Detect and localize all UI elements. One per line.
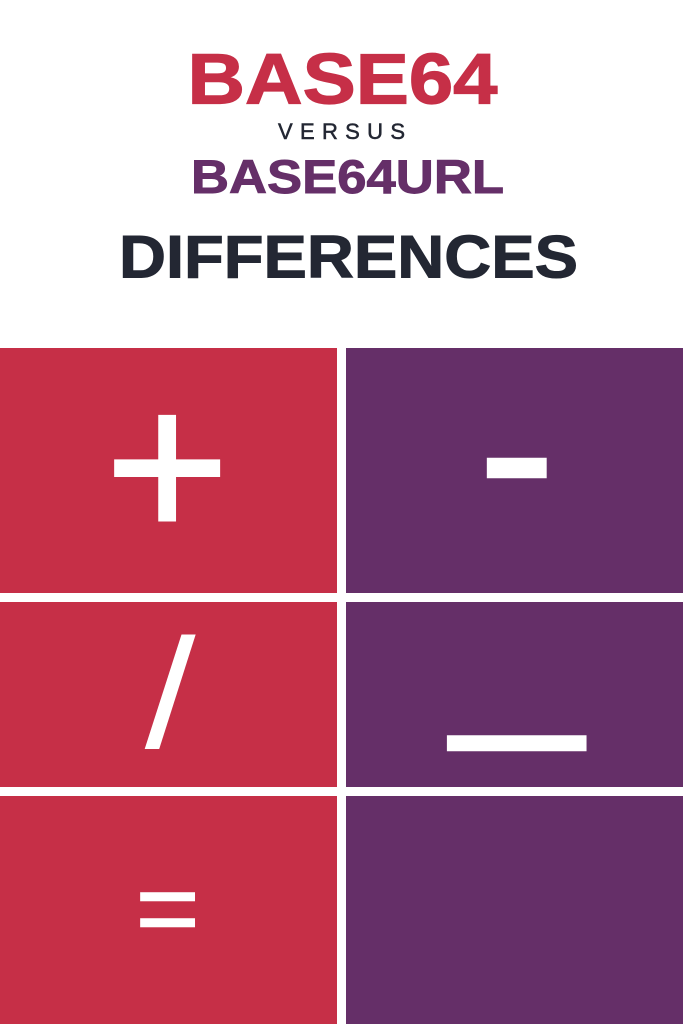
panel: plus sign, Base64 <box>0 347 337 593</box>
symbol: slash: / <box>145 608 196 782</box>
subheading: VERSUS: VERSUS <box>278 119 405 144</box>
symbol: equals: = <box>136 851 200 967</box>
panel: slash, Base64 <box>0 602 337 787</box>
heading: DIFFERENCES: DIFFERENCES <box>119 224 578 290</box>
title block <box>119 40 578 290</box>
symbol: underscore: _ <box>447 490 587 754</box>
symbol: hyphen: - <box>477 317 556 582</box>
panel: empty, Base64URL <box>346 796 683 1024</box>
panel: underscore, Base64URL <box>346 490 683 787</box>
panel: equals sign, Base64 <box>0 796 337 1024</box>
heading: BASE64URL: BASE64URL <box>191 150 504 203</box>
panel: minus sign, Base64URL <box>346 317 683 593</box>
symbol: plus: + <box>105 347 229 585</box>
heading: BASE64: BASE64 <box>188 40 498 120</box>
